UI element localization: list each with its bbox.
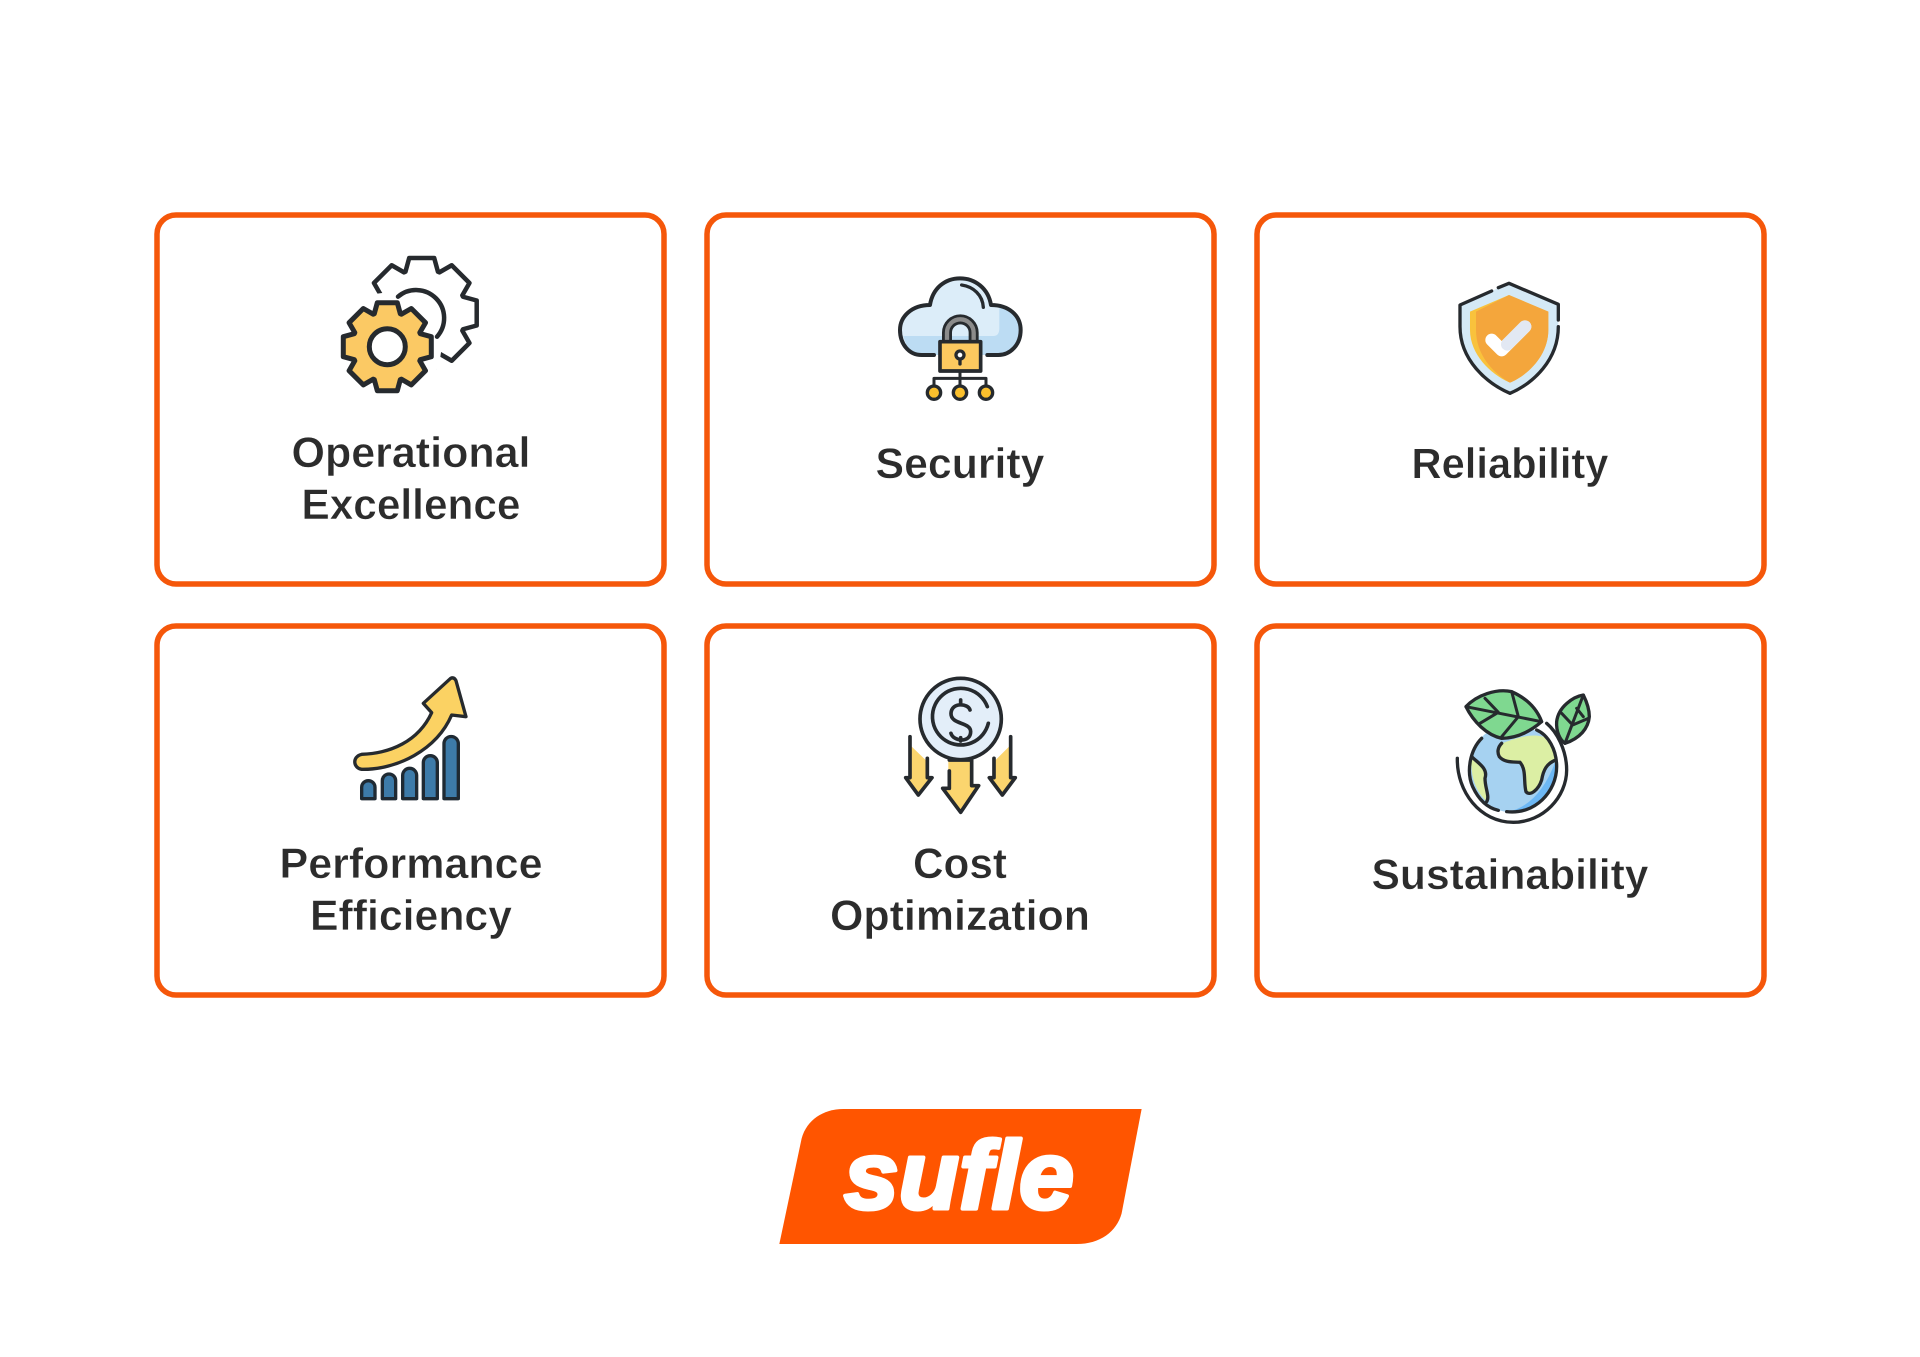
panel: Security xyxy=(707,215,1214,584)
label line 2: Efficiency xyxy=(310,893,512,940)
panel: Cost Optimization xyxy=(707,626,1214,995)
icon: gears xyxy=(333,258,477,401)
logo: sufle xyxy=(779,1109,1142,1244)
panel: Performance Efficiency xyxy=(157,626,664,995)
icon: cloud with padlock xyxy=(900,278,1021,399)
icon: coin with down arrows xyxy=(905,678,1016,812)
panel: Operational Excellence xyxy=(157,215,664,584)
label: Reliability: Reliability xyxy=(1412,441,1609,488)
icon: shield with check xyxy=(1460,283,1558,393)
label: Operational Excellence: Operational xyxy=(292,430,530,477)
label: Security: Security xyxy=(876,441,1045,488)
icon: large leaf xyxy=(1466,691,1542,738)
icon: growth arrow and bars xyxy=(355,678,466,799)
panel: Sustainability xyxy=(1257,626,1764,995)
logo: sufle: sufle xyxy=(844,1123,1074,1230)
panel: Reliability xyxy=(1257,215,1764,584)
icon: globe with leaves xyxy=(1457,691,1589,822)
label: Performance Efficiency: Performance xyxy=(280,841,542,888)
icon: small leaf xyxy=(1557,695,1589,743)
label line 2: Excellence xyxy=(302,482,520,529)
bar chart xyxy=(362,736,458,799)
label: Cost Optimization: Cost xyxy=(913,841,1007,888)
label: Sustainability: Sustainability xyxy=(1372,852,1649,899)
label line 2: Optimization xyxy=(830,893,1090,940)
